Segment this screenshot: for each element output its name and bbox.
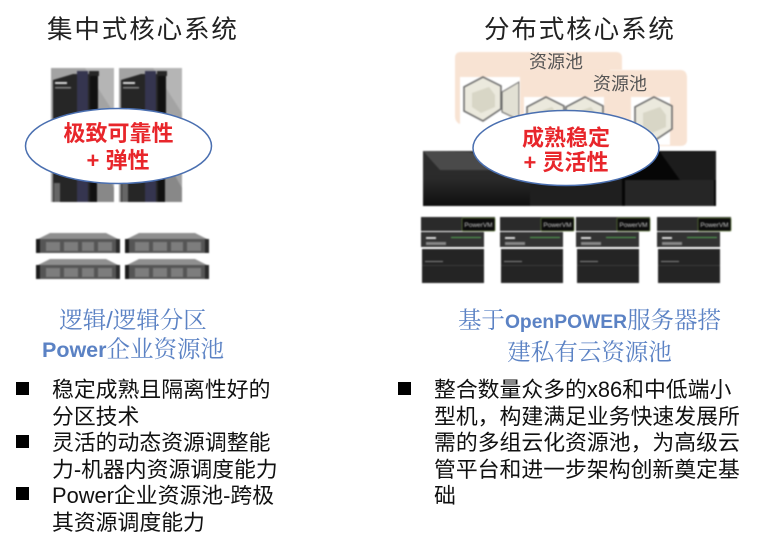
subtitle: left: 逻辑/逻辑分区 <box>59 307 207 333</box>
bullets: left list: 力-机器内资源调度能力 <box>52 456 278 482</box>
bullets: left list: 稳定成熟且隔离性好的 <box>52 377 270 402</box>
callout: mature stability and flexibility <box>473 110 659 186</box>
callout: reliability and elasticity <box>26 108 212 184</box>
bullets: right list: 型机，构建满足业务快速发展所 <box>434 404 740 428</box>
bullets: left list: Power企业资源池-跨极 <box>52 483 274 508</box>
resource pool 1 <box>455 52 622 125</box>
heading: centralized core system: 集中式核心系统 <box>47 16 239 44</box>
racks <box>51 68 182 202</box>
callout: reliability and elasticity: 极致可靠性 <box>63 121 174 146</box>
resource pool 2 <box>520 70 687 146</box>
label: pool 1: 资源池 <box>529 52 583 72</box>
bullets: left list <box>16 377 278 534</box>
bullets: right list: 础 <box>434 483 456 508</box>
black server band <box>423 151 716 206</box>
PowerVM servers <box>421 217 731 283</box>
subtitle: left: Power企业资源池 <box>42 336 224 362</box>
subtitle: right <box>458 307 721 364</box>
bullets: right list: 需的多组云化资源池，为高级云 <box>434 430 740 455</box>
callout: mature stability and flexibility: 成熟稳定 <box>522 126 610 150</box>
heading: distributed core system: 分布式核心系统 <box>484 16 676 44</box>
bullets: right list: 整合数量众多的x86和中低端小 <box>434 377 731 402</box>
callout: mature stability and flexibility: + 灵活性 <box>524 150 608 175</box>
subtitle: left <box>42 307 224 362</box>
diagram: hardware and callouts <box>24 52 732 284</box>
label: pool 2: 资源池 <box>593 74 647 94</box>
bullets: right list: 管平台和进一步架构创新奠定基 <box>434 456 740 482</box>
bullets: left list: 灵活的动态资源调整能 <box>52 430 270 455</box>
bullets: left list: 分区技术 <box>52 404 139 428</box>
bullets: right list <box>398 377 740 508</box>
subtitle: right: 建私有云资源池 <box>507 338 672 364</box>
subtitle: right: 基于OpenPOWER服务器搭 <box>458 307 721 333</box>
bullets: left list: 其资源调度能力 <box>52 510 205 534</box>
storage servers <box>36 233 209 279</box>
callout: reliability and elasticity: + 弹性 <box>87 148 149 173</box>
